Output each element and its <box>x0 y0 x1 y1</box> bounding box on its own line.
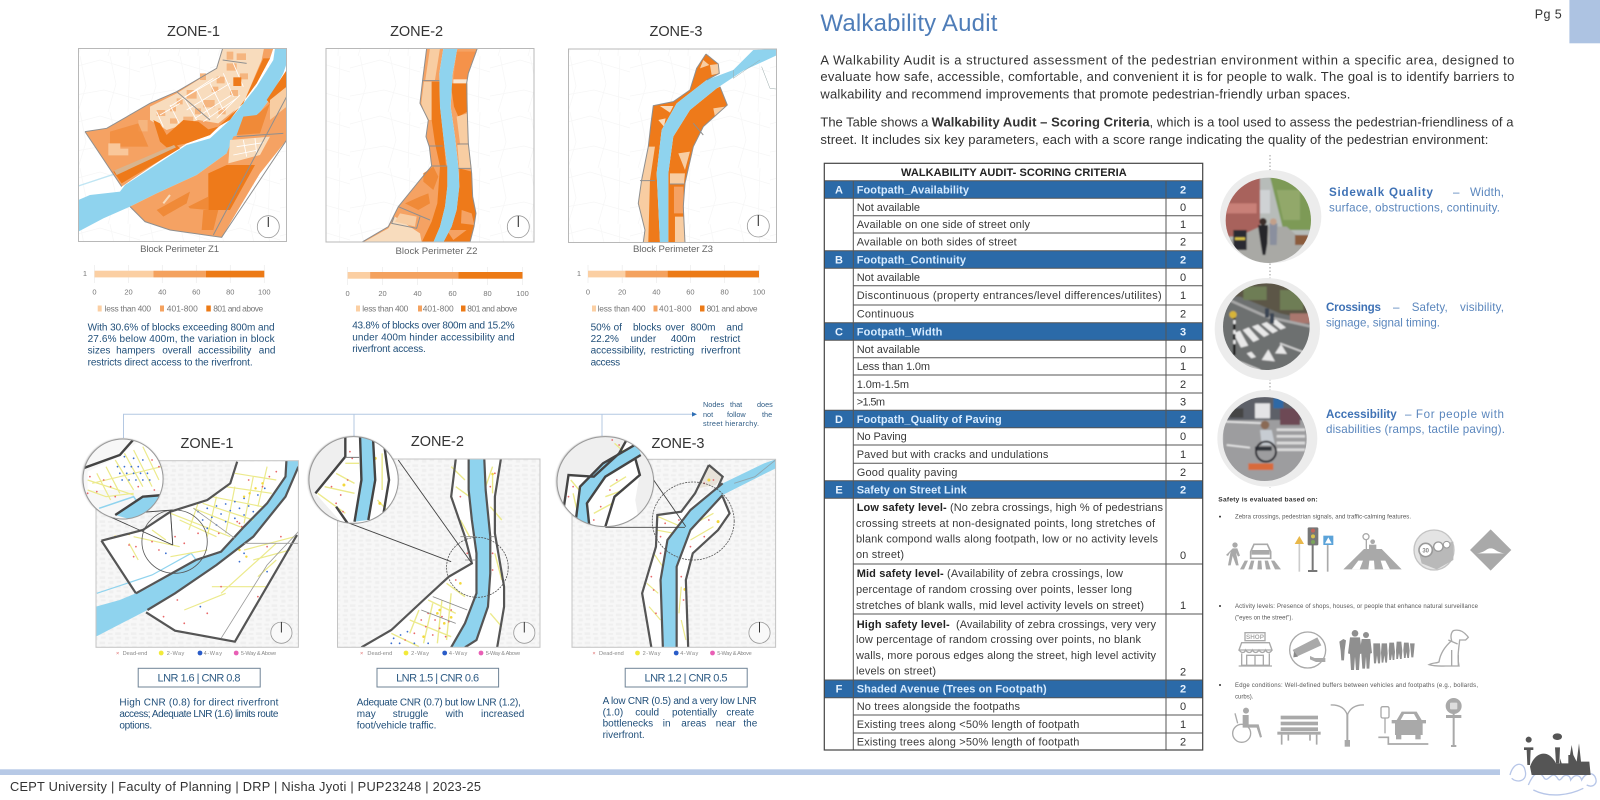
icon: shop <box>1239 633 1272 666</box>
text block: audit definition: evaluate how safe, accessible, comfortable, and convenient it is for people to walk. The goal is to identify barriers to <box>820 69 1514 84</box>
legend: zone 3 block sizes <box>592 304 758 314</box>
icon: speed limit signs <box>1414 530 1454 570</box>
legend: zone 1 block sizes: less than 400 <box>105 304 151 314</box>
section A: footpath availability: Available on both sides of street <box>857 237 1017 249</box>
frame: zone 1 map border <box>78 48 286 242</box>
legend: zone 3 block sizes: 401-800 <box>659 304 692 314</box>
text block: zone 3 block analysis: under <box>631 334 657 345</box>
chart: stacked bar zone 3: 100 <box>753 288 765 296</box>
section B: footpath continuity: 0 <box>1180 272 1186 284</box>
text block: zone 3 network analysis: (1.0) <box>603 707 623 718</box>
text block: zone 1 network analysis: High CNR (0.8) for direct riverfront <box>119 698 279 709</box>
text block: zone 3 block analysis: blocks <box>633 322 661 333</box>
page number: Pg 5 <box>1535 8 1562 22</box>
legend: zone 2 block sizes <box>356 304 518 314</box>
text block: zone 2 block analysis <box>352 321 515 355</box>
section B: footpath continuity: Footpath_Continuity <box>857 254 967 266</box>
text block: zone 2 network analysis: with <box>445 709 463 720</box>
icon: north arrow zone 1 <box>257 216 279 238</box>
icon: speed limit signs: 30 <box>1422 548 1430 554</box>
text: activity levels bullet <box>1219 604 1479 622</box>
text block: zone 1 network analysis <box>119 698 279 731</box>
text: crossings: Crossings <box>1326 301 1381 314</box>
text: accessibility: Accessibility <box>1326 408 1397 421</box>
photo: crossings <box>1215 278 1320 380</box>
frame: zone 3 map border <box>568 49 776 242</box>
chart: stacked bar zone 2 <box>346 267 529 298</box>
chart: stacked bar zone 3: 20 <box>618 288 626 296</box>
section C: footpath width: C <box>835 326 843 338</box>
footer band <box>0 769 1500 775</box>
legend: zone 1 block sizes: 801 and above <box>213 304 264 314</box>
text block: zone 3 block analysis: 50% <box>591 322 611 333</box>
section B: footpath continuity: Continuous <box>857 309 914 321</box>
arrow: bracket connecting magnified nodes to note <box>124 412 697 438</box>
section F: shaded avenue: 2 <box>1180 736 1186 748</box>
section D: footpath quality of paving: 2 <box>1180 414 1186 426</box>
section C: footpath width: 2 <box>1180 379 1186 391</box>
text block: zone 2 block analysis: 43.8% of blocks over 800m and 15.2% <box>352 321 515 332</box>
map: block perimeter zone 2 <box>326 48 534 242</box>
heading: network zone 3: ZONE-3 <box>652 436 704 452</box>
text: activity levels bullet: ("eyes on the street"). <box>1235 616 1293 622</box>
text: accessibility: disabilities (ramps, tactile paving). <box>1326 423 1505 436</box>
caption: block perimeter Z2: Block Perimeter Z2 <box>396 246 478 257</box>
text block: zone 2 network analysis: Adequate CNR (0.7) but low LNR (1.2), <box>357 698 521 709</box>
chart: stacked bar zone 3: 60 <box>686 288 695 296</box>
chart: stacked bar zone 3: 80 <box>720 288 729 296</box>
text block: zone 3 block analysis: 22.2% <box>591 334 619 345</box>
legend: zone 3 block sizes: 801 and above <box>707 304 758 314</box>
heading: upper zone 3: ZONE-3 <box>650 24 702 40</box>
section E: safety on street link: Low safety level- <box>857 502 947 514</box>
section C: footpath width <box>824 323 1203 408</box>
chart: stacked bar zone 1: 40 <box>158 288 166 296</box>
section D: footpath quality of paving: No Paving <box>857 431 907 443</box>
section F: shaded avenue: No trees alongside the footpaths <box>857 701 1020 713</box>
chart: stacked bar zone 1: 20 <box>124 288 133 296</box>
map: street network zone 3 <box>572 459 776 647</box>
section E: safety on street link: 2 <box>1180 484 1186 496</box>
text block: table introduction: The Table shows a <box>820 114 929 129</box>
legend: zone 2 block sizes: less than 400 <box>362 304 409 314</box>
section A: footpath availability: A <box>835 184 843 196</box>
legend: zone 2 node types: Dead-end <box>367 651 392 657</box>
chart: stacked bar zone 2: 0 <box>346 289 350 298</box>
section A: footpath availability: 2 <box>1180 184 1186 196</box>
caption: block perimeter Z1: Block Perimeter Z1 <box>140 244 219 255</box>
text block: zone 2 block analysis: riverfront access. <box>352 344 426 355</box>
section B: footpath continuity: 1 <box>1180 290 1186 302</box>
callout: zone 1 LNR CNR: LNR 1.6 | CNR 0.8 <box>158 672 240 684</box>
callout: nodes note: the <box>762 410 772 419</box>
icons: activity levels <box>1239 630 1468 670</box>
section B: footpath continuity: 2 <box>1180 254 1186 266</box>
section B: footpath continuity <box>824 251 1203 321</box>
frame: zone 3 network map border <box>572 459 776 647</box>
map: magnifier detail zone 3 <box>557 437 734 560</box>
footer text: CEPT University | Faculty of Planning | DRP | Nisha Jyoti | PUP23248 | 2023-25 <box>10 779 481 794</box>
table: walkability audit scoring criteria <box>824 163 1203 750</box>
legend: zone 3 node types: Dead-end <box>599 651 624 657</box>
icon: car parking <box>1378 707 1428 744</box>
section A: footpath availability: Footpath_Availability <box>857 184 970 196</box>
legend: zone 2 node types: 4-Way <box>449 651 468 657</box>
text: crossings: signage, signal timing. <box>1326 316 1440 329</box>
panel: safety evaluation <box>1218 496 1511 747</box>
chart: stacked bar zone 2: 20 <box>378 289 387 298</box>
text block: zone 3 network analysis: the <box>743 719 758 730</box>
text: sidewalk quality <box>1329 186 1504 214</box>
section B: footpath continuity: B <box>835 254 843 266</box>
map: block perimeter zone 1 <box>78 48 287 242</box>
text block: zone 3 block analysis: accessibility, <box>591 345 646 356</box>
section E: safety on street link: (Availability of zebra crossings, very very <box>956 619 1156 631</box>
text block: zone 3 block analysis: 800m <box>690 322 716 333</box>
text block: zone 2 block analysis: under 400m hinder accessibility and <box>352 332 515 343</box>
section D: footpath quality of paving: Footpath_Quality of Paving <box>857 414 1002 426</box>
text: crossings <box>1326 301 1504 329</box>
text block: zone 1 block analysis: sizes <box>88 345 110 356</box>
text block: zone 3 block analysis: restrict <box>710 334 741 345</box>
frame: zone 2 map border <box>326 48 534 242</box>
icon: wheelchair user <box>1233 708 1262 742</box>
section E: safety on street link: blank compond walls along footpath, low or no activity levels <box>856 534 1158 546</box>
icon: crowd of people <box>1339 630 1415 670</box>
section F: shaded avenue <box>824 680 1203 748</box>
section B: footpath continuity: Discontinuous (property entrances/level differences/utilites) <box>857 290 1162 302</box>
photo: sidewalk quality <box>1220 170 1321 267</box>
text: activity levels bullet: Activity levels: Presence of shops, houses, or people that enhance natural surveillance <box>1235 604 1479 610</box>
text block: zone 1 block analysis: restricts direct access to the riverfront. <box>88 357 253 368</box>
heading: upper zone 1: ZONE-1 <box>167 24 220 40</box>
chart: stacked bar zone 2: 40 <box>413 289 422 298</box>
section C: footpath width: 1 <box>1180 361 1186 373</box>
callout: nodes note: not <box>703 410 713 419</box>
section E: safety on street link: (Availability of zebra crossings, low <box>947 568 1123 580</box>
icon: speed bump sign <box>1470 529 1511 571</box>
legend: zone 2 node types: × <box>360 651 363 657</box>
callout: nodes note: Nodes <box>703 400 724 409</box>
section A: footpath availability: Available on one side of street only <box>857 219 1030 231</box>
icons: edge conditions <box>1233 698 1462 747</box>
section A: footpath availability: 2 <box>1180 237 1186 249</box>
section D: footpath quality of paving: 2 <box>1180 467 1186 479</box>
text block: zone 3 network analysis: bottlenecks <box>603 719 653 730</box>
legend: zone 2 node types: 2-Way <box>411 651 429 657</box>
text block: zone 3 network analysis: could <box>635 707 659 718</box>
text block: audit definition: walkability and recommend improvements that promote pedestrian-friendly urban spaces. <box>819 86 1350 101</box>
icon: shop: SHOP <box>1246 634 1264 641</box>
section E: safety on street link: (No zebra crossings, high % of pedestrians <box>950 502 1164 514</box>
callout: nodes note: follow <box>727 410 746 419</box>
section C: footpath width: Footpath_Width <box>857 326 943 338</box>
section D: footpath quality of paving: Paved but with cracks and undulations <box>857 449 1049 461</box>
text block: zone 1 block analysis: and <box>259 345 275 356</box>
text: accessibility: – For people with <box>1405 408 1504 421</box>
legend: zone 3 block sizes: less than 400 <box>598 304 646 314</box>
text block: zone 2 network analysis: increased <box>481 709 524 720</box>
callout: zone 2 LNR CNR: LNR 1.5 | CNR 0.6 <box>396 672 479 684</box>
page tab <box>1569 0 1600 43</box>
legend: zone 2 node types <box>360 651 520 657</box>
chart: stacked bar zone 1: 0 <box>92 288 97 296</box>
title: Walkability Audit: Walkability Audit <box>820 10 998 37</box>
callout: zone 3 LNR CNR: LNR 1.2 | CNR 0.5 <box>644 672 728 684</box>
section A: footpath availability: 0 <box>1180 202 1186 214</box>
heading: network zone 1: ZONE-1 <box>180 436 234 452</box>
text: crossings: visibility, <box>1460 301 1504 314</box>
legend: zone 2 block sizes: 801 and above <box>467 304 518 314</box>
section C: footpath width: >1.5m <box>857 396 885 408</box>
panel: street network node maps <box>83 400 776 741</box>
chart: stacked bar zone 3: 1 <box>577 269 581 278</box>
section F: shaded avenue: 2 <box>1180 684 1186 696</box>
icon: surveillance camera <box>1290 632 1326 668</box>
section C: footpath width: Less than 1.0m <box>857 361 930 373</box>
text block: zone 3 network analysis: potentially <box>672 707 717 718</box>
icon: traffic warden on road <box>1343 534 1402 569</box>
text block: zone 1 block analysis: accessibility <box>198 345 251 356</box>
map: block perimeter zone 3 <box>568 49 777 243</box>
section F: shaded avenue: 1 <box>1180 719 1186 731</box>
map: street network zone 2 <box>337 459 540 647</box>
callout: zone 1 LNR CNR <box>138 668 260 687</box>
text block: zone 3 network analysis: near <box>716 719 736 730</box>
text block: zone 1 block analysis: 27.6% below 400m, the variation in block <box>88 334 276 345</box>
text: sidewalk quality: – <box>1453 186 1460 199</box>
section C: footpath width: 1.0m-1.5m <box>857 379 909 391</box>
callout: nodes note: that <box>730 400 742 409</box>
panel: block perimeter maps <box>78 24 777 368</box>
text block: zone 3 block analysis: of <box>614 322 622 333</box>
map: magnifier detail zone 1 <box>83 438 207 573</box>
callout: nodes note <box>703 400 773 428</box>
text: crossings: – <box>1393 301 1400 314</box>
section B: footpath continuity: 2 <box>1180 309 1186 321</box>
section D: footpath quality of paving: D <box>835 414 843 426</box>
section C: footpath width: 0 <box>1180 344 1186 356</box>
text block: zone 3 network analysis: in <box>663 719 671 730</box>
legend: zone 3 node types: 2-Way <box>643 651 661 657</box>
text block: zone 3 network analysis <box>603 696 758 741</box>
chart: stacked bar zone 2: 100 <box>516 289 529 298</box>
legend: zone 1 node types: Dead-end <box>123 651 147 657</box>
section F: shaded avenue: Existing trees along <50% length of footpath <box>857 719 1079 731</box>
section F: shaded avenue: Shaded Avenue (Trees on Footpath) <box>857 684 1047 696</box>
legend: zone 2 node types: 5-Way & Above <box>486 651 520 657</box>
text: zebra crossings bullet: Zebra crossings, pedestrian signals, and traffic-calming features. <box>1235 514 1411 520</box>
section D: footpath quality of paving: 1 <box>1180 449 1186 461</box>
text block: zone 3 network analysis: create <box>726 707 755 718</box>
text block: zone 1 block analysis: With 30.6% of blocks exceeding 800m and <box>88 322 275 333</box>
text block: zone 3 block analysis: restricting <box>651 345 694 356</box>
text block: zone 3 block analysis: riverfront <box>701 345 741 356</box>
text block: table introduction: street. It includes six key parameters, each with a score range indicating the quality of the pedestrian environment: <box>820 132 1488 147</box>
section D: footpath quality of paving <box>824 410 1203 479</box>
text: accessibility <box>1326 408 1505 436</box>
chart: stacked bar zone 2: 80 <box>483 289 492 298</box>
section E: safety on street link <box>824 481 1203 678</box>
callout: zone 3 LNR CNR <box>625 668 747 687</box>
section C: footpath width: 3 <box>1180 326 1186 338</box>
chart: stacked bar zone 3 <box>577 265 765 296</box>
legend: zone 1 node types: 2-Way <box>167 651 185 657</box>
chart: stacked bar zone 1: 1 <box>83 269 87 278</box>
section E: safety on street link: on street) <box>856 549 904 561</box>
text block: audit definition <box>819 52 1514 101</box>
text block: zone 3 block analysis: access <box>591 357 620 368</box>
chart: stacked bar zone 1: 80 <box>226 288 234 296</box>
section E: safety on street link: Safety on Street Link <box>857 484 968 496</box>
section B: footpath continuity: Not available <box>857 272 920 284</box>
frame: zone 1 network map border <box>96 461 298 647</box>
text: edge conditions bullet: Edge conditions: Well-defined buffers between vehicles and footpaths (e.g., bollards, <box>1235 683 1478 689</box>
icon: traffic signals <box>1295 527 1333 572</box>
text: sidewalk quality: Sidewalk Quality <box>1329 186 1434 199</box>
icon: bus stop <box>1446 698 1462 746</box>
section D: footpath quality of paving: Good quality paving <box>857 467 957 479</box>
section C: footpath width: 3 <box>1180 396 1186 408</box>
frame: zone 2 network map border <box>338 459 540 647</box>
table header row: WALKABILITY AUDIT- SCORING CRITERIA <box>901 167 1127 179</box>
section E: safety on street link: 0 <box>1180 550 1186 562</box>
text block: zone 1 network analysis: options. <box>119 720 152 731</box>
section E: safety on street link: levels on street) <box>856 666 936 678</box>
text block: zone 1 block analysis <box>88 322 276 368</box>
text: sidewalk quality: Width, <box>1470 186 1504 199</box>
section E: safety on street link: Mid safety level- <box>857 568 944 580</box>
chart: stacked bar zone 2: 60 <box>448 289 457 298</box>
section E: safety on street link: High safety level- <box>857 619 950 631</box>
icon: north arrow zone 2 <box>507 216 529 238</box>
section E: safety on street link: percentage of random crossing over points, lesser long <box>856 584 1132 596</box>
text block: table introduction: , which is a tool used to assess the pedestrian-friendliness of a <box>1150 114 1514 129</box>
legend: zone 1 block sizes: 401-800 <box>167 304 198 314</box>
text block: zone 3 block analysis: over <box>665 322 685 333</box>
chart: stacked bar zone 1: 100 <box>258 288 271 296</box>
section E: safety on street link: stretches of blank walls, mid level activity levels on street) <box>856 600 1144 612</box>
text block: zone 1 block analysis: overall <box>162 345 192 356</box>
map: street network zone 1 <box>96 461 298 647</box>
heading: network zone 2: ZONE-2 <box>411 434 464 450</box>
icon: north arrow zone 3 <box>747 215 769 237</box>
section E: safety on street link: E <box>835 484 843 496</box>
text block: zone 3 network analysis: riverfront. <box>603 730 645 741</box>
icon: north arrow network zone 1 <box>271 622 292 643</box>
section E: safety on street link: low percentage of random crossing over points, no blank <box>856 634 1142 646</box>
legend: zone 1 node types: 4-Way <box>204 651 222 657</box>
icon: street lamp <box>1331 705 1364 747</box>
section F: shaded avenue: 0 <box>1180 701 1186 713</box>
section C: footpath width: Not available <box>857 344 920 356</box>
icon: seated dog <box>1429 630 1468 666</box>
text block: zone 3 block analysis: 400m <box>671 334 696 345</box>
panel: audit aspects with photos <box>1215 170 1505 487</box>
text: edge conditions bullet <box>1219 683 1478 701</box>
heading: safety is evaluated: Safety is evaluated based on: <box>1218 496 1318 503</box>
chart: stacked bar zone 3: 40 <box>652 288 661 296</box>
callout: zone 2 LNR CNR <box>377 668 499 687</box>
section A: footpath availability: Not available <box>857 202 920 214</box>
text block: table introduction <box>820 114 1514 147</box>
legend: zone 1 node types: 5-Way & Above <box>241 651 276 657</box>
heading: upper zone 2: ZONE-2 <box>390 24 443 40</box>
section A: footpath availability: 1 <box>1180 219 1186 231</box>
section E: safety on street link: 2 <box>1180 666 1186 678</box>
legend: zone 1 block sizes <box>98 304 264 314</box>
photo: accessibility <box>1217 390 1317 487</box>
legend: zone 1 node types <box>116 651 276 657</box>
icon: north arrow network zone 2 <box>514 622 535 643</box>
legend: zone 2 block sizes: 401-800 <box>423 304 454 314</box>
legend: zone 3 node types <box>592 651 752 657</box>
text block: zone 2 network analysis: may <box>357 709 376 720</box>
icons: crossing and traffic calming <box>1226 527 1511 572</box>
map: magnifier detail zone 2 <box>309 437 508 597</box>
text block: audit definition: A Walkability Audit is a structured assessment of the pedestrian environment within a specific area, designed to <box>820 52 1514 67</box>
callout: nodes note: does <box>757 400 773 409</box>
caption: block perimeter Z3: Block Perimeter Z3 <box>633 244 713 255</box>
section D: footpath quality of paving: 0 <box>1180 431 1186 443</box>
text block: zone 1 block analysis: hampers <box>116 345 155 356</box>
dotted connector behind photos <box>1269 155 1271 488</box>
icon: pedestrian and car at zebra <box>1226 542 1281 569</box>
section E: safety on street link: 1 <box>1180 600 1186 612</box>
legend: zone 3 node types: 4-Way <box>680 651 699 657</box>
text: crossings: Safety, <box>1412 301 1448 314</box>
text block: table introduction: Walkability Audit – Scoring Criteria <box>932 114 1150 129</box>
text block: zone 1 network analysis: access; Adequate LNR (1.6) limits route <box>119 709 279 720</box>
section A: footpath availability <box>824 181 1203 249</box>
text block: zone 3 block analysis <box>591 322 743 368</box>
legend: zone 3 node types: 5-Way & Above <box>717 651 752 657</box>
section E: safety on street link: crossing streets at non-designated points, long stretches of <box>856 518 1156 530</box>
section E: safety on street link: walls, more porous edges along the street, high level activity <box>855 650 1156 662</box>
chart: stacked bar zone 1 <box>83 265 271 296</box>
text: edge conditions bullet: curbs). <box>1235 695 1254 701</box>
text block: zone 3 block analysis: and <box>726 322 743 333</box>
icon: north arrow network zone 3 <box>749 622 770 643</box>
text block: zone 3 network analysis: A low CNR (0.5) and a very low LNR <box>603 696 757 707</box>
text block: zone 2 network analysis: struggle <box>393 709 429 720</box>
legend: zone 3 node types: × <box>592 651 596 657</box>
section F: shaded avenue: Existing trees along >50% length of footpath <box>857 736 1079 748</box>
icon: bench <box>1277 716 1321 745</box>
text: sidewalk quality: surface, obstructions, continuity. <box>1329 201 1500 214</box>
legend: zone 1 node types: × <box>116 651 119 657</box>
logo: city skyline with script <box>1510 733 1596 795</box>
callout: nodes note: street hierarchy. <box>703 419 759 428</box>
text block: zone 2 network analysis: foot/vehicle traffic. <box>357 720 436 731</box>
section F: shaded avenue: F <box>836 684 843 696</box>
chart: stacked bar zone 3: 0 <box>586 288 590 296</box>
chart: stacked bar zone 1: 60 <box>192 288 200 296</box>
text block: zone 2 network analysis <box>357 698 524 731</box>
text block: zone 3 network analysis: areas <box>681 719 706 730</box>
